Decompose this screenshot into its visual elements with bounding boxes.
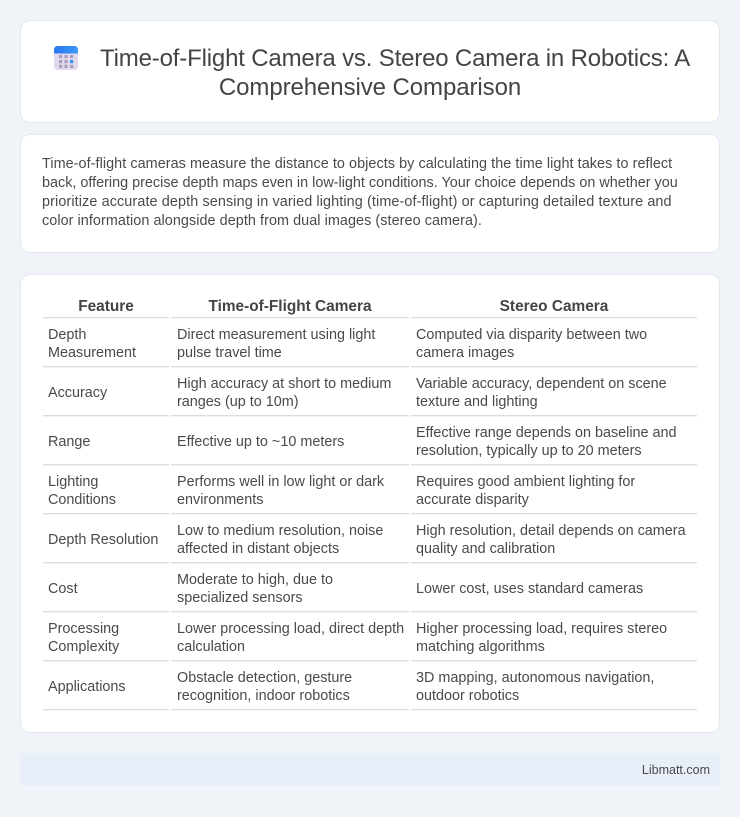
row: processing complexity: calculation [177,639,245,655]
row: applications: Applications [48,679,126,695]
row: lighting conditions: Conditions [48,492,116,508]
row: lighting conditions: environments [177,492,263,508]
text block: introduction: back, offering precise depth maps even in low-light conditions. Your choice depends on whether you [42,175,678,191]
panel: header [20,20,720,123]
text block: introduction: prioritize accurate depth sensing in varied lighting (time-of-flight) or capturing detailed texture and [42,194,672,210]
row: depth resolution: affected in distant objects [177,541,339,557]
row: depth measurement: camera images [416,345,514,361]
row: range: Range [48,434,90,450]
row: accuracy: Variable accuracy, dependent on scene [416,376,667,392]
row: range: Effective up to ~10 meters [177,434,344,450]
row: depth resolution: Depth Resolution [48,532,158,548]
row: range [43,425,697,466]
row: cost: specialized sensors [177,590,303,606]
footer bar [20,753,720,786]
text block: introduction [42,156,678,229]
row: depth resolution: quality and calibration [416,541,555,557]
table header: Feature [78,298,134,315]
title: Time-of-Flight Camera vs. Stereo Camera in Robotics: A [100,45,690,72]
row: depth measurement: pulse travel time [177,345,282,361]
row: applications: Obstacle detection, gesture [177,670,352,686]
row: cost: Lower cost, uses standard cameras [416,581,643,597]
row: depth measurement: Direct measurement using light [177,327,375,343]
row: lighting conditions: Lighting [48,474,98,490]
row: applications: recognition, indoor robotics [177,688,350,704]
table header: Time-of-Flight Camera [208,298,372,315]
row: lighting conditions [43,474,697,515]
row: processing complexity: Processing [48,621,119,637]
row: depth resolution: Low to medium resolution, noise [177,523,383,539]
panel: comparison table [20,274,720,733]
row: lighting conditions: Requires good ambient lighting for [416,474,635,490]
row: cost: Cost [48,581,78,597]
table header [43,298,697,319]
row: accuracy [43,376,697,417]
row: depth resolution: High resolution, detail depends on camera [416,523,686,539]
row: processing complexity [43,621,697,662]
row: accuracy: High accuracy at short to medium [177,376,391,392]
panel: introduction [20,134,720,253]
row: applications [43,670,697,711]
title: Comprehensive Comparison [219,74,521,101]
title [100,45,690,101]
row: applications: 3D mapping, autonomous navigation, [416,670,654,686]
row: depth measurement [43,327,697,368]
row: depth measurement: Depth [48,327,86,343]
row: depth resolution [43,523,697,564]
row: cost [43,572,697,613]
text block: introduction: color information alongside depth from dual images (stereo camera). [42,213,482,229]
row: lighting conditions: accurate disparity [416,492,529,508]
row: accuracy: Accuracy [48,385,107,401]
row: depth measurement: Computed via disparity between two [416,327,647,343]
row: cost: Moderate to high, due to [177,572,333,588]
table header: Stereo Camera [500,298,608,315]
row: accuracy: texture and lighting [416,394,538,410]
row: processing complexity: Higher processing load, requires stereo [416,621,667,637]
footer text: Libmatt.com: Libmatt.com [642,763,710,777]
text block: introduction: Time-of-flight cameras measure the distance to objects by calculating the time light takes to reflect [42,156,672,172]
icon: calendar [54,46,78,70]
row: range: Effective range depends on baseline and [416,425,677,441]
row: processing complexity: Complexity [48,639,119,655]
row: lighting conditions: Performs well in low light or dark [177,474,384,490]
row: processing complexity: matching algorithms [416,639,545,655]
row: range: resolution, typically up to 20 meters [416,443,642,459]
row: processing complexity: Lower processing load, direct depth [177,621,404,637]
row: depth measurement: Measurement [48,345,136,361]
row: accuracy: ranges (up to 10m) [177,394,299,410]
row: applications: outdoor robotics [416,688,519,704]
